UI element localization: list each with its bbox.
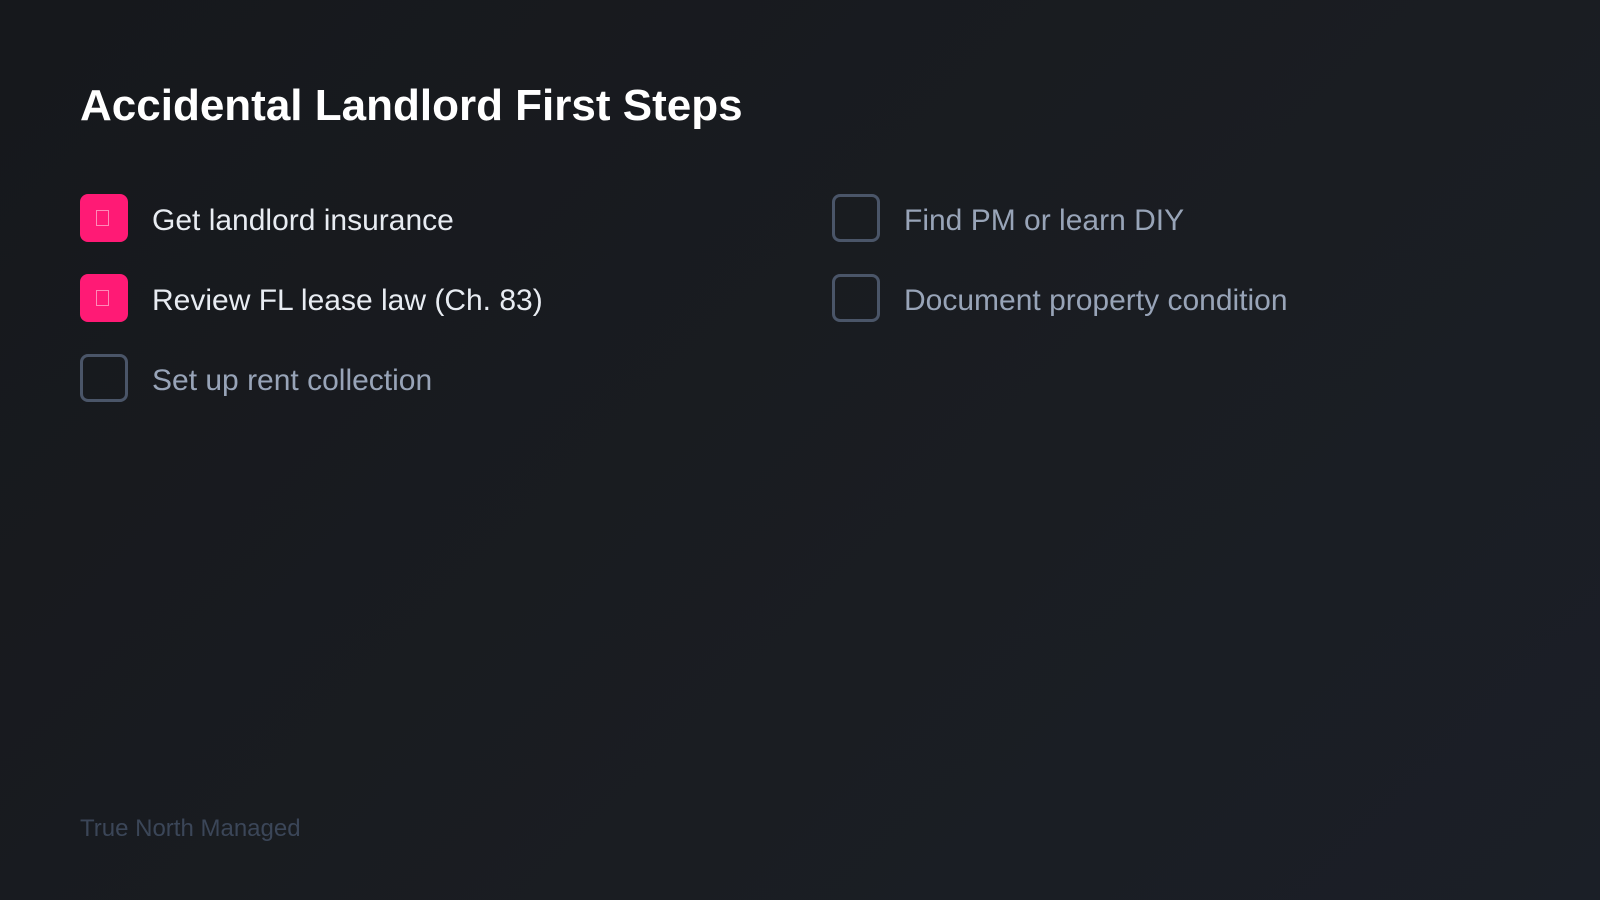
title: Accidental Landlord First Steps	[80, 81, 743, 130]
item: review FL lease law (checked)	[80, 274, 543, 322]
item: document property condition	[832, 274, 1288, 322]
item: set up rent collection	[80, 354, 432, 402]
item: get landlord insurance (checked): Get landlord insurance	[152, 204, 454, 237]
item: review FL lease law (checked): Review FL lease law (Ch. 83)	[152, 284, 543, 317]
item: find PM or learn DIY: Find PM or learn DIY	[904, 204, 1184, 237]
footer brand: True North Managed	[80, 815, 301, 842]
item: document property condition: Document property condition	[904, 284, 1288, 317]
item: get landlord insurance (checked)	[80, 194, 454, 242]
item: set up rent collection: Set up rent collection	[152, 364, 432, 397]
item: find PM or learn DIY	[832, 194, 1184, 242]
